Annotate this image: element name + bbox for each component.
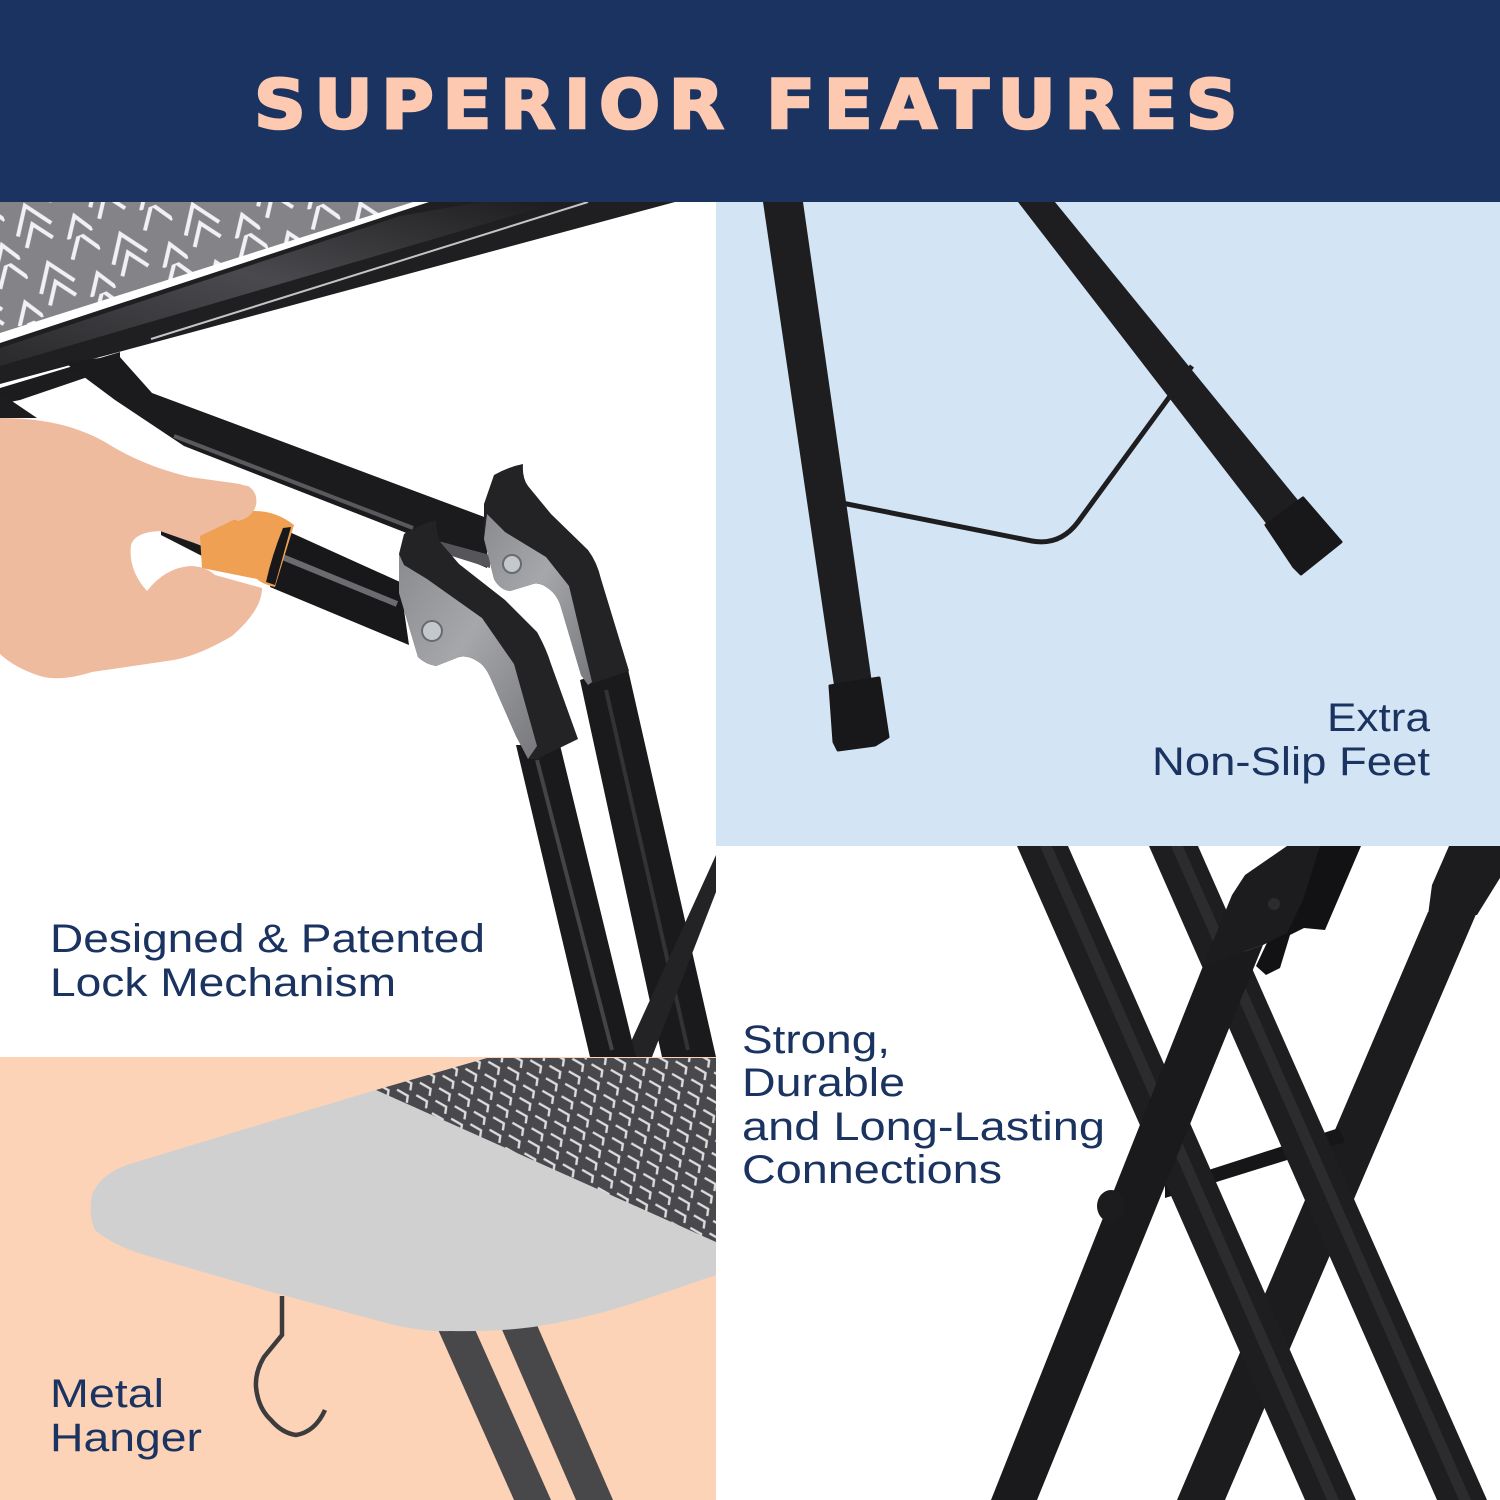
panel: connections <box>716 846 1500 1500</box>
front bracket <box>399 520 578 759</box>
board legs <box>436 1325 613 1500</box>
wire support <box>842 366 1192 542</box>
cross bar <box>1165 1128 1345 1198</box>
ironing board underside <box>0 202 675 418</box>
hand holding orange grip <box>0 418 294 678</box>
panel: non-slip feet <box>716 202 1500 846</box>
right leg <box>1018 202 1306 535</box>
left rubber foot <box>830 678 888 750</box>
header band <box>0 0 1500 202</box>
label: feet: Extra <box>1327 696 1431 740</box>
right rubber foot <box>1266 498 1341 574</box>
front leg tube <box>516 745 636 1057</box>
label: hanger <box>50 1372 202 1460</box>
label: lock mechanism: Lock Mechanism <box>50 961 396 1005</box>
rear bracket <box>484 464 629 685</box>
metal hook <box>256 1296 325 1435</box>
rear legs descending right <box>1017 846 1487 1500</box>
label: connections: Connections <box>742 1148 1002 1192</box>
front left leg with hinge bracket <box>991 846 1361 1500</box>
label: feet <box>1152 696 1431 784</box>
label: connections: and Long-Lasting <box>742 1105 1105 1149</box>
panel: metal hanger <box>0 1057 716 1500</box>
pin <box>1097 1190 1125 1222</box>
label: connections <box>742 1018 1105 1192</box>
label: hanger: Metal <box>50 1372 164 1416</box>
left leg <box>763 202 873 692</box>
grey board tip <box>91 1090 716 1331</box>
diagonal brace <box>624 855 716 1057</box>
rear leg tube <box>580 665 716 1057</box>
label: connections: Durable <box>742 1061 905 1105</box>
front right leg <box>1177 846 1500 1500</box>
label: feet: Non-Slip Feet <box>1152 740 1430 784</box>
label: hanger: Hanger <box>50 1416 202 1460</box>
label: connections: Strong, <box>742 1018 890 1062</box>
label: lock mechanism: Designed & Patented <box>50 917 485 961</box>
upper cross tube <box>64 356 490 568</box>
label: lock mechanism <box>50 917 485 1005</box>
patterned board cover <box>376 1058 716 1242</box>
panel: lock mechanism <box>0 202 716 1057</box>
lower cross tube <box>161 529 409 645</box>
title: SUPERIOR FEATURES <box>254 66 1246 145</box>
